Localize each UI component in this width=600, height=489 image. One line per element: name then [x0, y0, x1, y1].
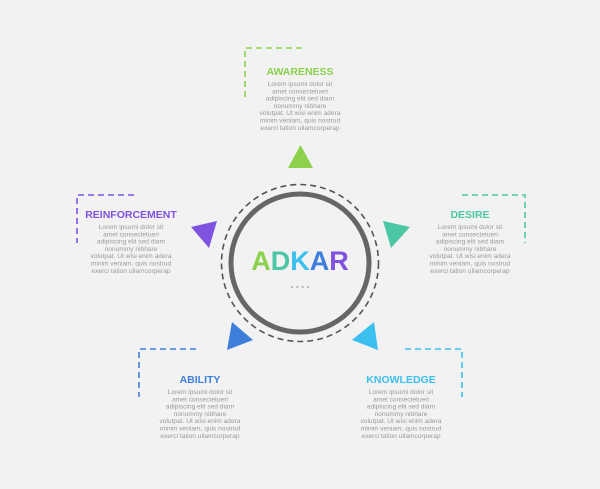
panel: awareness: AWARENESS: [266, 66, 334, 78]
arrow: awareness: [288, 145, 313, 168]
panel: knowledge: minim veniam, quis nostrud: [361, 426, 441, 432]
panel: awareness: volutpat. Ut wisi enim adera: [260, 110, 341, 117]
center circle: [222, 184, 378, 342]
panel: reinforcement: REINFORCEMENT: [85, 209, 177, 221]
panel: ability: amet consectetueri: [172, 396, 228, 403]
title: ADKAR: ADKAR: [251, 246, 349, 276]
panel: reinforcement: minim veniam, quis nostrud: [91, 260, 171, 268]
panel: ability: ABILITY: [180, 374, 220, 386]
panel: awareness: amet consectetueri: [272, 88, 328, 95]
panel: knowledge: nonummy nibhare: [375, 411, 428, 418]
panel: reinforcement: exerci tation ullamcorperap: [91, 268, 171, 275]
panel: desire: adipiscing elit sed diam: [436, 239, 505, 246]
panel: desire: Lorem ipsumi dolor sit: [438, 224, 502, 231]
panel: awareness: exerci tation ullamcorperap: [260, 125, 340, 132]
panel: reinforcement: adipiscing elit sed diam: [97, 239, 166, 246]
arrow: knowledge: [352, 322, 378, 350]
panel: knowledge: Lorem ipsumi dolor sit: [369, 389, 433, 396]
panel: desire: exerci tation ullamcorperap: [430, 268, 510, 275]
panel: desire: minim veniam, quis nostrud: [430, 260, 510, 268]
panel: knowledge: exerci tation ullamcorperap: [361, 433, 441, 440]
panel: knowledge: adipiscing elit sed diam: [367, 404, 436, 411]
panel: ability: nonummy nibhare: [174, 411, 227, 418]
panel: reinforcement: amet consectetueri: [103, 231, 159, 238]
panel: ability: volutpat. Ut wisi enim adera: [160, 418, 241, 425]
panel: reinforcement: volutpat. Ut wisi enim adera: [90, 253, 172, 260]
arrow: desire: [383, 221, 410, 248]
panel: ability: Lorem ipsumi dolor sit: [168, 389, 232, 396]
panel: desire: volutpat. Ut wisi enim adera: [430, 253, 511, 260]
panel: ability: exerci tation ullamcorperap: [160, 433, 240, 440]
panel: reinforcement: Lorem ipsumi dolor sit: [99, 224, 163, 231]
panel: desire: DESIRE: [450, 209, 490, 221]
panel: knowledge: volutpat. Ut wisi enim adera: [360, 418, 442, 425]
arrow: reinforcement: [191, 221, 217, 248]
panel: awareness: adipiscing elit sed diam: [266, 96, 335, 103]
panel: ability: adipiscing elit sed diam: [166, 404, 235, 411]
panel: awareness: [245, 48, 341, 132]
panel: awareness: nonummy nibhare: [274, 103, 327, 110]
panel: knowledge: [360, 349, 462, 440]
panel: ability: minim veniam, quis nostrud: [160, 426, 240, 432]
panel: reinforcement: nonummy nibhare: [105, 246, 158, 253]
dots: [291, 286, 309, 288]
panel: reinforcement: [77, 195, 177, 275]
panel: knowledge: KNOWLEDGE: [366, 374, 436, 386]
panel: ability: [139, 349, 241, 440]
panel: awareness: minim veniam, quis nostrud: [260, 118, 340, 124]
panel: desire: [430, 195, 525, 275]
panel: knowledge: amet consectetueri: [373, 396, 429, 403]
arrow: ability: [227, 322, 253, 350]
panel: awareness: Lorem ipsumi dolor sit: [268, 81, 332, 88]
panel: desire: nonummy nibhare: [444, 246, 497, 253]
panel: desire: amet consectetueri: [442, 231, 498, 238]
